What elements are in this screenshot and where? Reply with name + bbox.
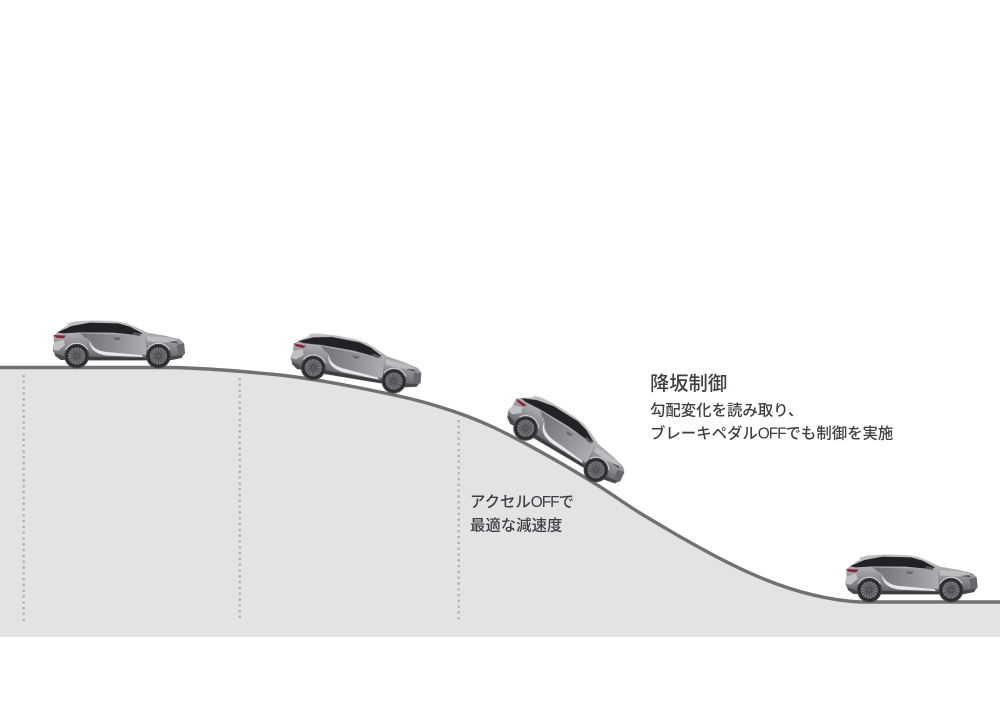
dotted marker 3 (458, 420, 460, 622)
dotted marker 2 (239, 378, 241, 621)
note: accelerator off (470, 493, 574, 534)
heading: downhill control: 降坂制御 (650, 373, 727, 395)
car on flat top (53, 320, 185, 368)
note: accelerator off: アクセルOFFで (470, 493, 574, 511)
slope profile line (0, 368, 1000, 602)
car on flat bottom (845, 554, 978, 602)
description: downhill control: ブレーキペダルOFFでも制御を実施 (650, 424, 893, 442)
hill ground (0, 368, 1000, 637)
car on steep slope (499, 385, 637, 494)
note: accelerator off: 最適な減速度 (470, 516, 562, 534)
car on gentle slope (288, 329, 426, 398)
description: downhill control (650, 402, 893, 442)
dotted marker 1 (23, 375, 25, 622)
description: downhill control: 勾配変化を読み取り、 (650, 402, 803, 420)
